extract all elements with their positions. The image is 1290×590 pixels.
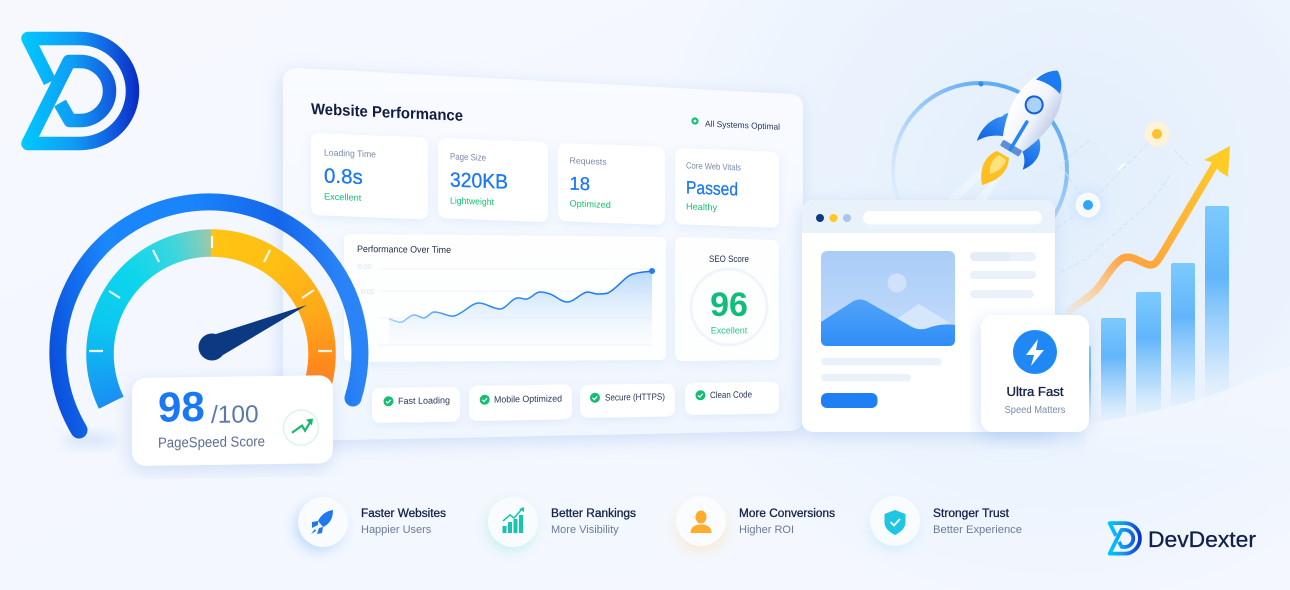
card: requests: 18	[570, 172, 590, 194]
card: page size: Lightweight	[450, 195, 494, 207]
card: core web vitals	[675, 148, 779, 228]
card: loading time: Loading Time	[324, 148, 376, 159]
rocket flame	[981, 151, 1009, 185]
icon: lightning bolt	[1013, 330, 1057, 374]
card: core web vitals: Passed	[686, 177, 738, 199]
pill: secure https: Secure (HTTPS)	[605, 392, 665, 403]
pill: fast loading	[372, 387, 460, 423]
bar chart	[1070, 206, 1290, 470]
brand name: DevDexter	[1148, 527, 1256, 552]
benefit: faster websites: Faster Websites	[361, 508, 446, 520]
chart: performance over time: 0:00	[361, 289, 375, 296]
panel: website performance dashboard	[283, 68, 803, 441]
benefit: faster websites	[295, 497, 446, 551]
pill: mobile optimized	[469, 384, 572, 421]
benefit: more conversions: More Conversions	[739, 508, 835, 520]
pill: clean code	[685, 382, 779, 415]
card: pagespeed score	[132, 375, 333, 466]
icon: person	[690, 510, 712, 533]
rocket fins	[976, 104, 1017, 152]
pill: clean code: Clean Code	[710, 389, 752, 400]
card: pagespeed score: /100	[211, 401, 259, 429]
card: loading time: Excellent	[324, 192, 362, 203]
icon: trend up	[284, 410, 318, 445]
pill: fast loading: Fast Loading	[398, 395, 450, 406]
card: SEO score: SEO Score	[709, 254, 749, 264]
benefit: better rankings	[487, 497, 636, 551]
card: core web vitals: Healthy	[686, 201, 718, 213]
gauge	[58, 202, 360, 484]
browser button	[821, 393, 878, 408]
benefit: stronger trust	[870, 496, 1022, 550]
benefit: better rankings: Better Rankings	[551, 508, 636, 520]
icon: small logo	[1110, 523, 1140, 554]
gauge outer arc	[58, 202, 360, 430]
node: blue	[1073, 190, 1103, 220]
card: loading time	[311, 133, 428, 219]
card: requests: Optimized	[570, 198, 611, 210]
benefit: stronger trust: Better Experience	[933, 524, 1022, 536]
card: core web vitals: Core Web Vitals	[686, 160, 741, 173]
gauge colour arc	[86, 229, 336, 408]
icon: rising bars	[502, 507, 524, 533]
card: ultra fast	[981, 315, 1089, 432]
card: loading time: 0.8s	[324, 165, 363, 189]
benefit: more conversions: Higher ROI	[739, 524, 794, 536]
network lines and nodes	[1057, 122, 1188, 273]
logo: DevDexter mark	[28, 38, 132, 144]
brand: DevDexter	[1110, 523, 1256, 554]
card: page size	[438, 138, 548, 222]
benefit: better rankings: More Visibility	[551, 524, 619, 536]
browser window	[802, 200, 1055, 432]
arrow: growth	[1067, 146, 1230, 313]
chart line	[389, 271, 652, 322]
rocket	[948, 53, 1081, 202]
card: requests: Requests	[570, 155, 607, 167]
benefit: more conversions	[676, 496, 835, 551]
ring behind rocket	[893, 82, 1067, 257]
browser title bar	[802, 200, 1055, 233]
gauge needle	[198, 305, 307, 360]
status: all systems optimal: All Systems Optimal	[705, 118, 780, 132]
icon: shield	[884, 510, 906, 535]
icon: small rocket	[311, 510, 333, 534]
benefit: faster websites: Happier Users	[361, 524, 432, 536]
card: page size: 320KB	[450, 168, 508, 194]
heading: website performance: Website Performance	[311, 101, 463, 125]
benefit: stronger trust: Stronger Trust	[933, 508, 1010, 520]
rocket window	[1023, 93, 1046, 117]
rocket body	[993, 59, 1077, 158]
card: ultra fast: Ultra Fast	[1006, 384, 1064, 399]
card: SEO score: 96	[710, 286, 748, 324]
card: pagespeed score: 98	[158, 383, 205, 431]
card: SEO score	[675, 237, 779, 361]
card: ultra fast: Speed Matters	[1004, 405, 1066, 416]
rocket nozzle	[1000, 139, 1022, 157]
rocket nose	[1036, 63, 1070, 94]
card: page size: Page Size	[450, 151, 486, 163]
pill: mobile optimized: Mobile Optimized	[494, 394, 562, 405]
chart area	[389, 271, 652, 345]
browser text lines	[821, 252, 1036, 382]
chart title: Performance Over Time	[357, 243, 451, 255]
card: pagespeed score: PageSpeed Score	[158, 434, 265, 452]
card: requests	[558, 143, 665, 225]
chart: performance over time	[344, 234, 666, 362]
browser image placeholder	[821, 251, 955, 346]
card: SEO score: Excellent	[711, 326, 748, 336]
chart: performance over time: 0:00	[358, 264, 372, 271]
gauge ticks	[89, 236, 332, 351]
node: orange	[1144, 122, 1170, 146]
pill: secure https	[580, 384, 675, 418]
